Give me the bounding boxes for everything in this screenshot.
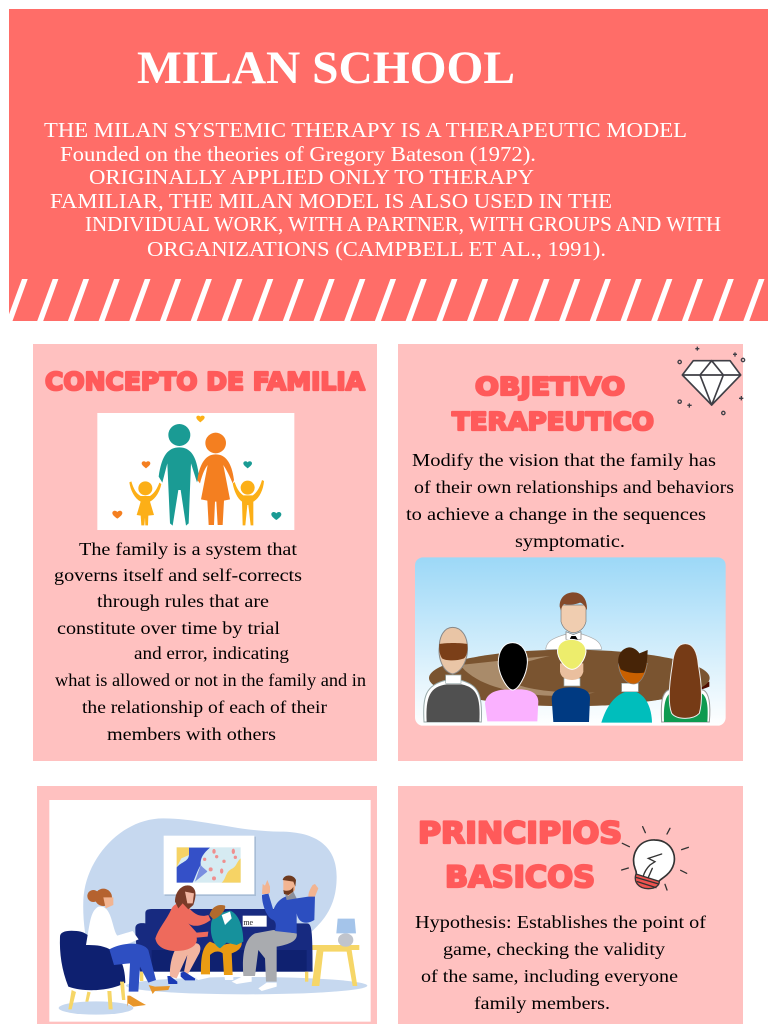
heading: principios basicos: BASICOS — [445, 860, 595, 894]
body text: family definition: through rules that are — [97, 591, 269, 611]
body text: family definition: members with others — [107, 724, 276, 744]
body text: family definition: what is allowed or not in the family and in — [55, 670, 366, 690]
body text: therapeutic objective: Modify the vision that the family has — [412, 450, 716, 470]
body text: basic principles: Hypothesis: Establishes the point of — [415, 912, 706, 932]
white diagonal stripes — [6, 279, 764, 321]
heading: objetivo terapeutico — [452, 372, 654, 436]
body text: basic principles — [415, 912, 706, 1013]
header intro text: ORIGINALLY APPLIED ONLY TO THERAPY — [89, 165, 534, 189]
body text: basic principles: game, checking the validity — [443, 939, 665, 959]
header intro text — [44, 118, 721, 261]
panel: therapy session illustration — [37, 786, 377, 1024]
body text: basic principles: family members. — [474, 993, 610, 1013]
header intro text: INDIVIDUAL WORK, WITH A PARTNER, WITH GROUPS AND WITH — [85, 212, 721, 236]
body text: family definition: The family is a system that — [79, 539, 297, 559]
heading: principios basicos — [418, 816, 622, 894]
image: meeting around a table — [415, 557, 726, 726]
header intro text: FAMILIAR, THE MILAN MODEL IS ALSO USED IN THE — [50, 189, 612, 213]
header intro text: THE MILAN SYSTEMIC THERAPY IS A THERAPEUTIC MODEL — [44, 118, 687, 142]
panel: concepto de familia — [33, 344, 377, 761]
header intro text: ORGANIZATIONS (CAMPBELL ET AL., 1991). — [147, 237, 606, 261]
panel: principios basicos — [398, 786, 743, 1024]
image: family therapy session: me — [243, 918, 254, 927]
body text: family definition: governs itself and self-corrects — [54, 565, 302, 585]
image: family illustration — [97, 413, 294, 530]
panel: objetivo terapeutico — [398, 344, 745, 761]
body text: therapeutic objective: symptomatic. — [515, 531, 625, 551]
image: family therapy session — [49, 800, 371, 1022]
body text: therapeutic objective — [406, 450, 734, 551]
body text: therapeutic objective: of their own relationships and behaviors — [414, 477, 734, 497]
panel: header banner — [6, 9, 768, 321]
heading: objetivo terapeutico: OBJETIVO — [475, 372, 625, 401]
body text: family definition: constitute over time by trial — [57, 618, 280, 638]
heading: objetivo terapeutico: TERAPEUTICO — [452, 407, 654, 436]
icon: diamond — [678, 347, 745, 415]
body text: basic principles: of the same, including everyone — [421, 966, 678, 986]
header intro text: Founded on the theories of Gregory Bateson (1972). — [60, 142, 536, 166]
heading: principios basicos: PRINCIPIOS — [418, 816, 622, 850]
title: MILAN SCHOOL — [137, 42, 515, 94]
body text: family definition: and error, indicating — [134, 643, 289, 663]
heading: concepto de familia: CONCEPTO DE FAMILIA — [45, 367, 366, 396]
icon: light bulb — [622, 827, 688, 890]
figures on the sofa — [155, 875, 318, 991]
body text: family definition: the relationship of each of their — [82, 697, 327, 717]
body text: therapeutic objective: to achieve a change in the sequences — [406, 504, 706, 524]
body text: family definition — [54, 539, 366, 744]
